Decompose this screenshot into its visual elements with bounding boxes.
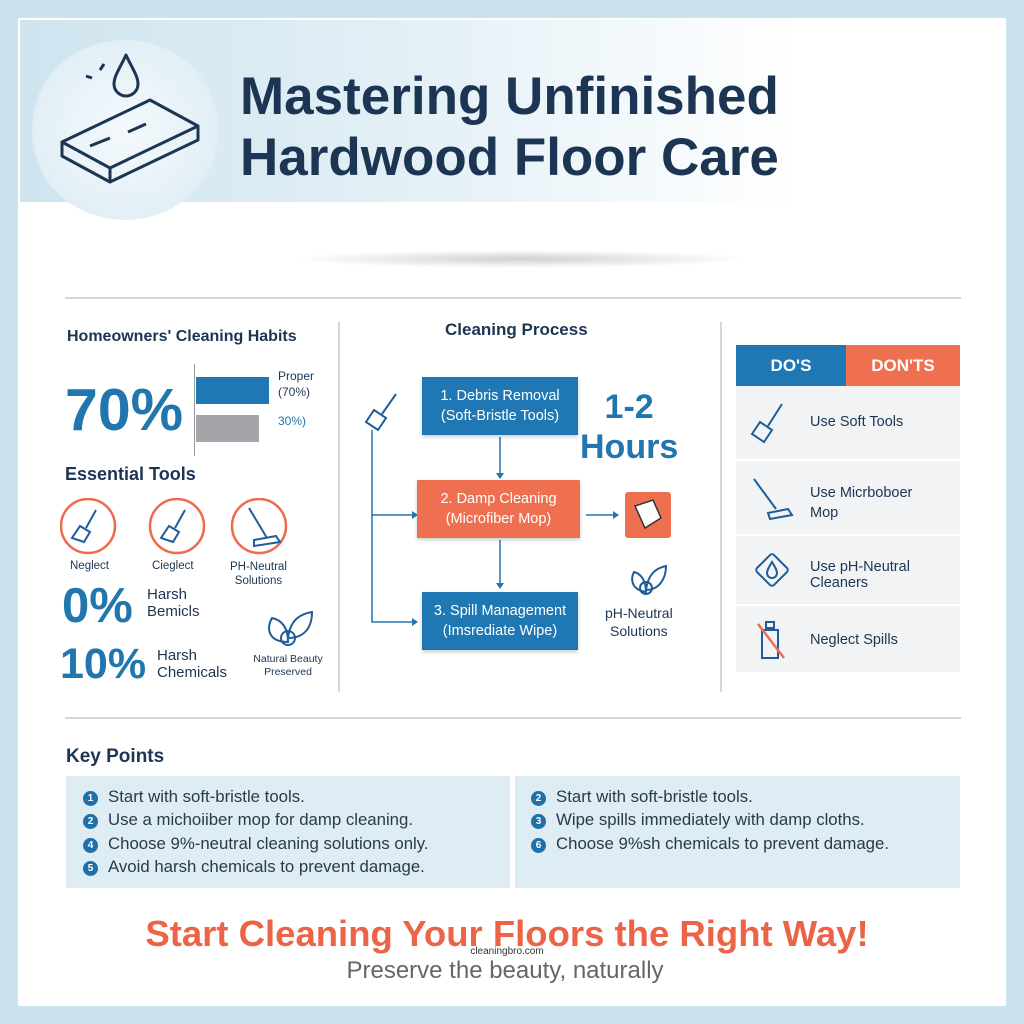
tools icons xyxy=(60,498,288,587)
heading tools: Essential Tools xyxy=(65,464,196,484)
step 1: 1. Debris Removal xyxy=(440,388,560,404)
key points right: 2 xyxy=(536,793,541,804)
icon: leaves natural beauty: Preserved xyxy=(264,666,312,678)
stat 10% xyxy=(60,640,227,688)
bar chart: Proper xyxy=(278,369,314,383)
icon: brush xyxy=(364,393,397,432)
stat 10%: 10% xyxy=(60,640,146,688)
panel: dos and donts xyxy=(736,345,960,386)
footer call to action: Start Cleaning Your Floors the Right Way! xyxy=(145,913,869,954)
row microfiber: Mop xyxy=(810,505,838,521)
key points left: Start with soft-bristle tools. xyxy=(108,787,305,806)
step 1: (Soft-Bristle Tools) xyxy=(441,408,559,424)
text ph-neutral: pH-Neutral xyxy=(605,605,673,621)
header donts xyxy=(846,345,960,386)
step 2 xyxy=(417,480,580,538)
title xyxy=(240,67,779,187)
step 1 xyxy=(422,377,578,435)
stat 70%: 70% xyxy=(65,377,183,443)
key points left: 5 xyxy=(88,863,93,874)
key points left: Choose 9%-neutral cleaning solutions only. xyxy=(108,834,429,853)
text ph-neutral: Solutions xyxy=(610,623,668,639)
tools icons: PH-Neutral xyxy=(230,561,287,573)
bar chart: 30%) xyxy=(278,414,306,428)
stat 10%: Chemicals xyxy=(157,664,227,681)
icon: leaves ph xyxy=(631,564,667,595)
key points right xyxy=(515,776,960,888)
header dos xyxy=(736,345,846,386)
key points left: Use a michoiiber mop for damp cleaning. xyxy=(108,810,413,829)
step 3: (Imsrediate Wipe) xyxy=(443,623,557,639)
heading habits: Homeowners' Cleaning Habits xyxy=(67,328,297,345)
stat 0% xyxy=(62,579,200,633)
panel: cleaning process xyxy=(364,320,678,654)
icon: cloth xyxy=(625,492,671,538)
icon: leaves natural beauty: Natural Beauty xyxy=(253,653,323,665)
row soft tools: Use Soft Tools xyxy=(810,414,903,430)
key points left: Avoid harsh chemicals to prevent damage. xyxy=(108,857,425,876)
flow connectors xyxy=(371,430,619,626)
tools icons: Cieglect xyxy=(152,560,194,572)
row neglect spills: Neglect Spills xyxy=(810,632,898,648)
step 2: 2. Damp Cleaning xyxy=(440,491,557,507)
key points right: Wipe spills immediately with damp cloths. xyxy=(556,810,865,829)
key points left: 1 xyxy=(88,793,93,804)
shadow xyxy=(290,250,750,268)
row ph cleaners: Use pH-Neutral Cleaners xyxy=(810,559,910,591)
stat 10%: Harsh xyxy=(157,647,197,664)
heading process: Cleaning Process xyxy=(445,320,588,339)
key points right: Choose 9%sh chemicals to prevent damage. xyxy=(556,834,889,853)
key points left xyxy=(66,776,510,888)
header dos: DO'S xyxy=(771,356,811,375)
row microfiber xyxy=(736,461,960,534)
row neglect spills xyxy=(736,606,960,672)
footer tagline: Preserve the beauty, naturally xyxy=(346,957,664,984)
stat 0%: Bemicls xyxy=(147,603,200,620)
stat hours xyxy=(580,388,678,466)
bar chart xyxy=(194,364,314,456)
stat 0%: Harsh xyxy=(147,586,187,603)
header donts: DON'TS xyxy=(871,356,935,375)
row soft tools xyxy=(736,386,960,459)
key points right: 6 xyxy=(536,840,541,851)
step 2: (Microfiber Mop) xyxy=(446,511,551,527)
tools icons: Neglect xyxy=(70,560,109,572)
footer url: cleaningbro.com xyxy=(470,946,544,957)
key points left: 4 xyxy=(88,840,93,851)
stat 0%: 0% xyxy=(62,579,133,633)
tools icons: Solutions xyxy=(235,575,282,587)
step 3: 3. Spill Management xyxy=(434,603,566,619)
icon: floor plank with water drop xyxy=(30,40,220,220)
row microfiber: Use Micrboboer xyxy=(810,485,912,501)
stat hours: Hours xyxy=(580,428,678,466)
title: Mastering Unfinished xyxy=(240,67,779,126)
step 3 xyxy=(422,592,578,650)
key points left: 2 xyxy=(88,816,93,827)
row ph cleaners xyxy=(736,536,960,604)
panel: habits xyxy=(60,328,323,688)
icon: leaves natural beauty xyxy=(253,610,323,678)
key points right: 3 xyxy=(536,816,541,827)
key points right: Start with soft-bristle tools. xyxy=(556,787,753,806)
heading key points: Key Points xyxy=(66,746,164,767)
header band xyxy=(20,20,800,202)
title: Hardwood Floor Care xyxy=(240,128,779,187)
stat hours: 1-2 xyxy=(605,388,654,426)
bar chart: (70%) xyxy=(278,385,310,399)
text ph-neutral xyxy=(605,605,673,639)
